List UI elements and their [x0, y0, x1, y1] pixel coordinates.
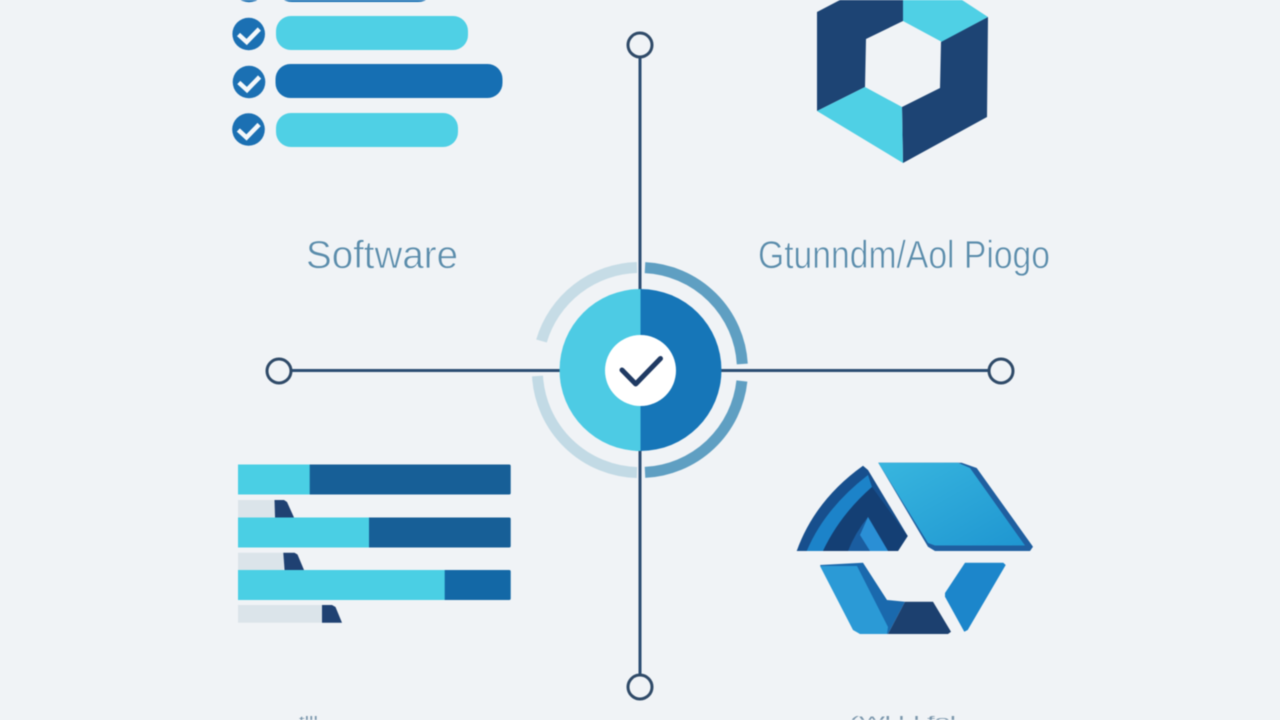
- bar row 3: [238, 570, 511, 600]
- sub-bar row 2: [238, 553, 304, 570]
- disc: two-tone circle: [560, 289, 721, 451]
- logo: top-left layered sector: [797, 466, 908, 551]
- checklist row 2: [233, 64, 502, 98]
- sub-bar row 3: [238, 605, 342, 623]
- heading: Software: Software: [306, 234, 458, 277]
- logo: top-right panel: [878, 463, 1033, 551]
- bar row 1: [238, 464, 511, 494]
- axis: vertical line: [638, 57, 642, 675]
- chart: progress bars: [238, 464, 511, 623]
- logo: bottom-right panel: [945, 563, 1006, 632]
- ring: segmented arcs: [538, 268, 742, 472]
- node: right: [989, 359, 1013, 383]
- icon: white check badge: [605, 335, 676, 406]
- axis: horizontal line: [291, 369, 989, 372]
- central badge with rings and check: [538, 268, 742, 472]
- heading: garbled program label: Gtunndm/Aol Piogo: [758, 234, 1050, 277]
- checklist row 3: [232, 113, 458, 147]
- bar row 2: [238, 518, 511, 548]
- icon: recycle hexagon logo: [797, 463, 1033, 634]
- checklist row 1: [232, 16, 468, 50]
- node: top: [628, 33, 652, 57]
- sub-bar row 1: [238, 500, 294, 518]
- logo: bottom-left panel: [820, 563, 951, 634]
- checklist row 0: clipped at top: [233, 0, 435, 2]
- node: left: [267, 359, 291, 383]
- panel: checklist: [232, 0, 502, 147]
- icon: hexagon cube: [817, 0, 988, 163]
- node: bottom: [628, 675, 652, 699]
